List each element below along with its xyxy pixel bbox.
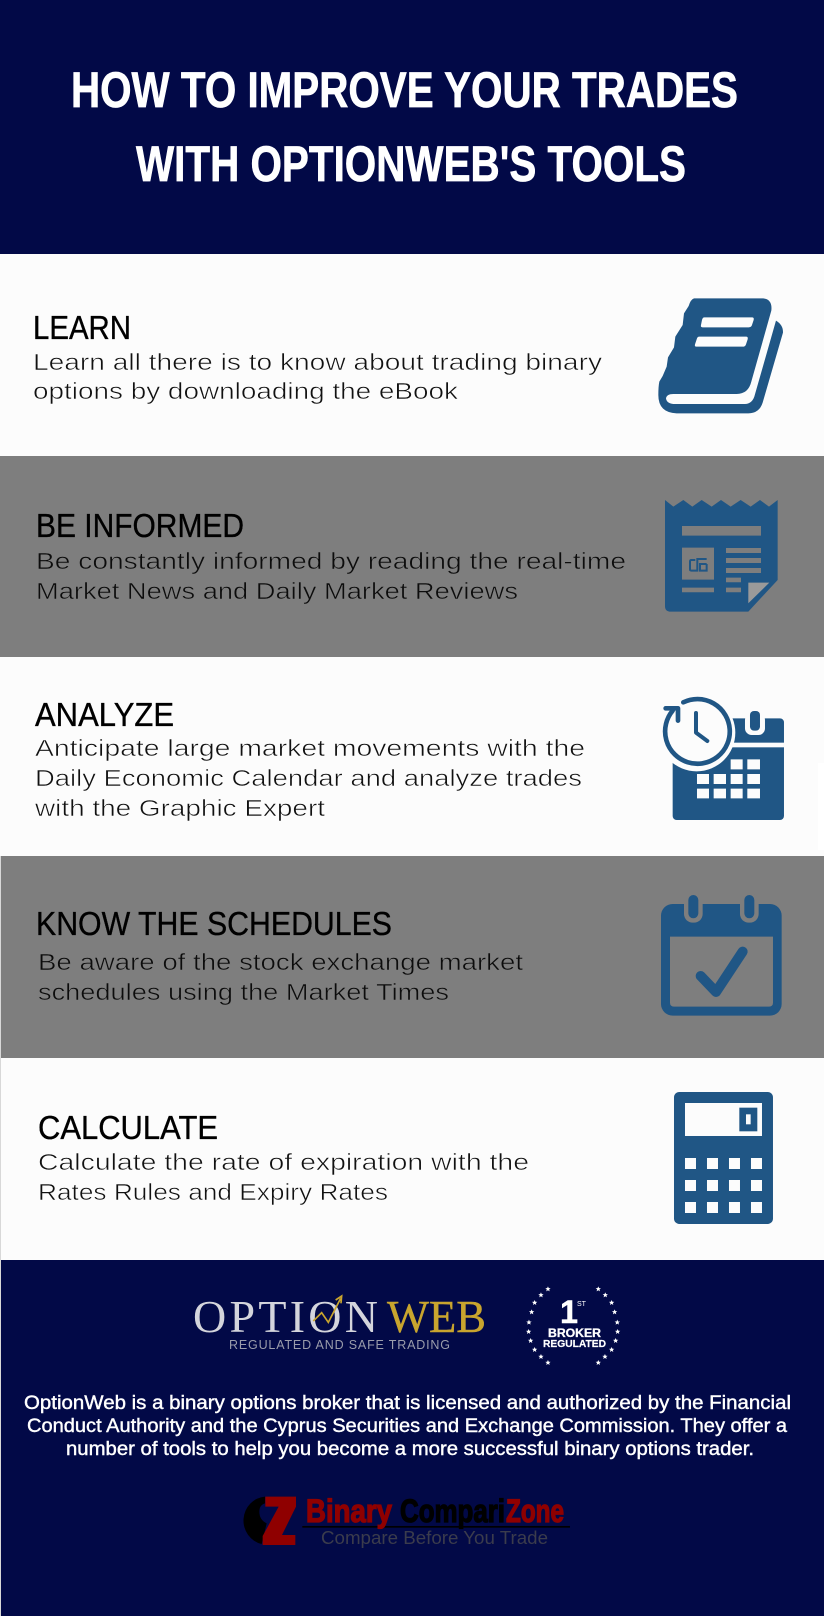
logo: Binary CompariZone: Binary <box>306 1493 392 1529</box>
panel: analyze <box>0 657 824 856</box>
text: calculate description: Calculate the rate of expiration with the <box>38 1149 529 1175</box>
heading: be informed: BE INFORMED <box>36 507 244 544</box>
badge: 1st broker regulated: ST <box>577 1301 587 1308</box>
badge: 1st broker regulated: REGULATED <box>543 1338 606 1350</box>
title: WITH OPTIONWEB'S TOOLS <box>136 136 686 192</box>
icon: newspaper <box>665 500 778 612</box>
logo: Binary CompariZone: Zone <box>506 1493 564 1529</box>
badge: 1st broker regulated: BROKER <box>548 1328 602 1340</box>
icon: calendar with check <box>661 893 782 1016</box>
text: about OptionWeb <box>24 1393 791 1460</box>
badge: 1st broker regulated <box>526 1286 620 1365</box>
badge: 1st broker regulated: 1 <box>560 1294 578 1330</box>
logo: Binary CompariZone: Compare Before You Trade <box>321 1528 548 1548</box>
text: know the schedules description: Be aware of the stock exchange market <box>38 949 524 975</box>
heading: learn: LEARN <box>33 309 131 346</box>
text: analyze description: Anticipate large market movements with the <box>35 735 585 761</box>
text: calculate description: Rates Rules and Expiry Rates <box>38 1179 388 1205</box>
heading: know the schedules: KNOW THE SCHEDULES <box>36 905 392 942</box>
text: know the schedules description: schedules using the Market Times <box>38 979 449 1005</box>
text: learn description: Learn all there is to know about trading binary <box>33 349 603 375</box>
panel: learn <box>0 254 824 456</box>
panel: be informed <box>0 456 824 657</box>
panel: header <box>0 0 824 254</box>
heading: calculate: CALCULATE <box>38 1109 218 1146</box>
text: analyze description <box>34 735 585 821</box>
text: learn description: options by downloading the eBook <box>33 378 459 404</box>
text: learn description <box>33 349 603 404</box>
text: analyze description: Daily Economic Calendar and analyze trades <box>35 765 582 791</box>
panel: calculate <box>1 1058 824 1260</box>
logo: Binary CompariZone <box>243 1493 570 1548</box>
icon: calendar with clock <box>658 694 784 820</box>
logo: Binary CompariZone: Compari <box>400 1493 505 1529</box>
panel: footer <box>1 1260 824 1616</box>
icon: book <box>658 298 783 413</box>
text: calculate description <box>38 1149 529 1205</box>
logo: OptionWeb: REGULATED AND SAFE TRADING <box>229 1338 450 1352</box>
text: be informed description: Be constantly informed by reading the real-time <box>36 548 626 574</box>
text: be informed description: Market News and Daily Market Reviews <box>36 578 518 604</box>
title <box>71 62 738 192</box>
text: about OptionWeb: Conduct Authority and the Cyprus Securities and Exchange Commission. They offer a <box>27 1416 787 1437</box>
text: be informed description <box>36 548 626 604</box>
text: about OptionWeb: OptionWeb is a binary options broker that is licensed and authorized by the Financial <box>24 1393 791 1414</box>
heading: analyze: ANALYZE <box>35 696 174 733</box>
text: analyze description: with the Graphic Expert <box>34 795 326 821</box>
icon: calculator <box>674 1092 773 1224</box>
logo: OptionWeb: OPTION <box>193 1291 378 1342</box>
text: about OptionWeb: number of tools to help you become a more successful binary options trader. <box>66 1439 754 1460</box>
panel: know the schedules <box>0 856 824 1616</box>
text: know the schedules description <box>38 949 524 1005</box>
logo: OptionWeb: WEB <box>387 1291 486 1342</box>
logo: OptionWeb <box>193 1291 486 1352</box>
